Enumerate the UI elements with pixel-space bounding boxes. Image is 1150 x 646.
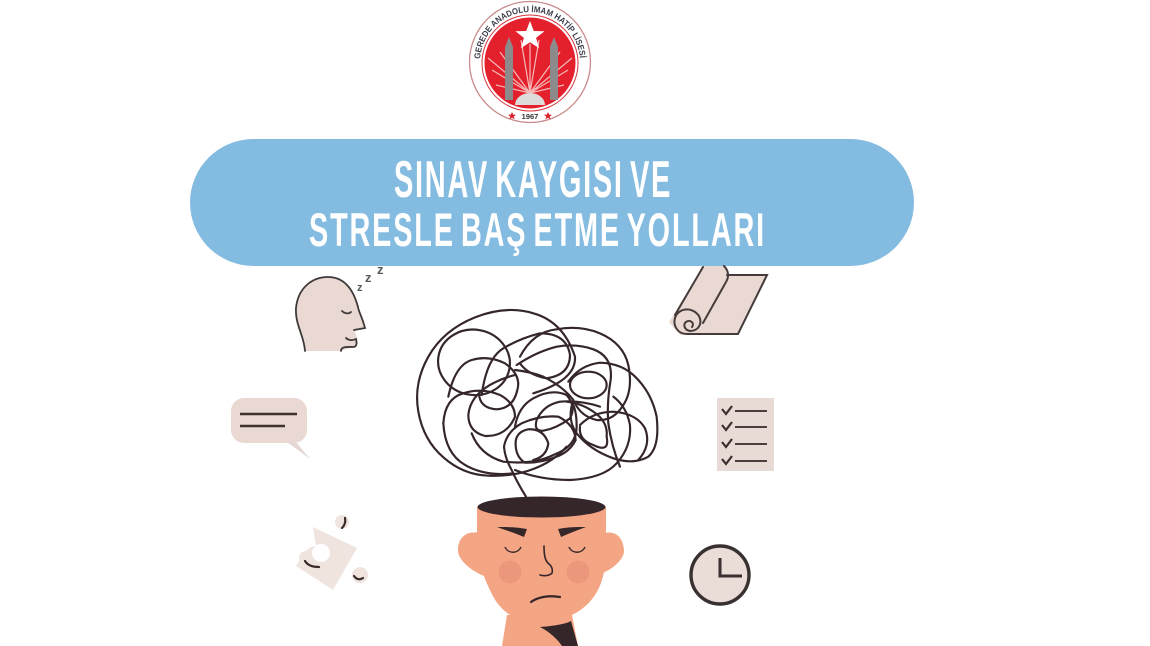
cheeks <box>498 560 522 584</box>
title text line 2: STRESLE BAŞ ETME YOLLARI <box>309 203 766 256</box>
mouth <box>531 596 560 602</box>
logo: school emblem: 1967 <box>522 112 538 121</box>
logo: school emblem <box>468 0 592 124</box>
icon: sleeping head: z <box>365 270 372 285</box>
collar shadow <box>540 621 578 646</box>
tangled thought scribble <box>417 310 657 497</box>
icon: checklist <box>717 398 774 471</box>
title banner <box>190 139 914 266</box>
nose <box>540 546 552 576</box>
open skull <box>478 496 606 518</box>
eyebrows <box>497 527 586 537</box>
icon: sleeping head: z <box>377 262 384 277</box>
face <box>477 507 606 623</box>
ears <box>458 532 624 576</box>
icon: clock <box>691 546 749 604</box>
title text line 1: SINAV KAYGISI VE <box>394 151 672 209</box>
logo: school emblem: GEREDE ANADOLU İMAM HATİP LİSESİ <box>474 4 588 58</box>
icon: paper scroll <box>669 266 767 335</box>
icon: puzzle piece <box>296 515 368 590</box>
icon: speech bubble <box>231 398 310 459</box>
snore letters: z <box>357 282 363 294</box>
closed eyes <box>505 547 585 552</box>
neck <box>502 615 578 646</box>
icon: sleeping head <box>296 262 384 351</box>
illustrated head <box>458 496 624 646</box>
